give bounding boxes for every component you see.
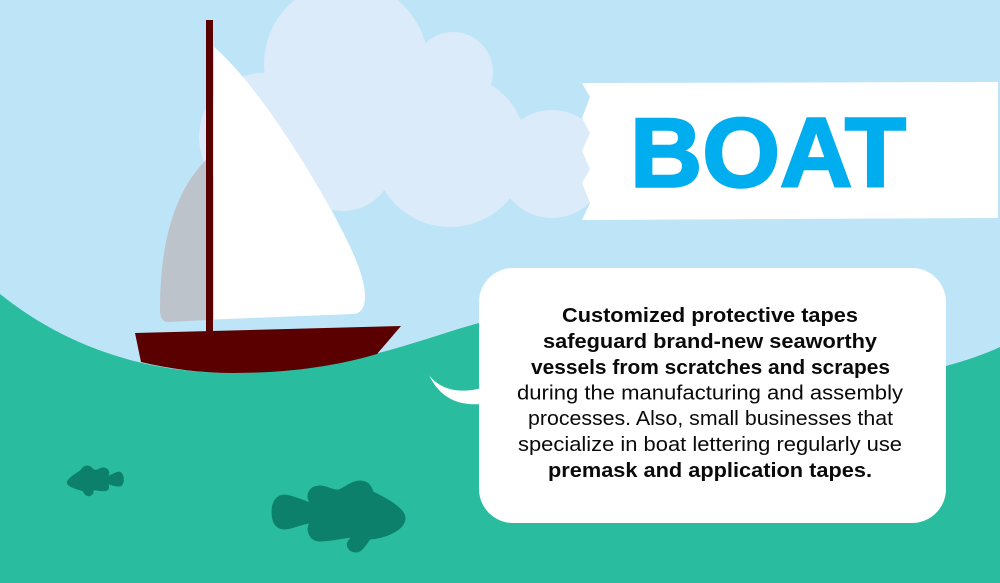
description text: specialize in boat lettering regularly use <box>518 434 902 456</box>
description text: safeguard brand-new seaworthy <box>543 331 878 353</box>
hull <box>135 326 401 373</box>
banner <box>582 82 998 220</box>
small fish <box>67 466 124 496</box>
sea <box>0 294 1000 583</box>
bubble tail <box>429 375 482 404</box>
bubble body <box>479 268 946 523</box>
sailboat <box>135 20 401 373</box>
speech bubble <box>429 268 946 523</box>
description text: Customized protective tapes <box>562 305 858 327</box>
cloud <box>199 0 606 227</box>
large fish <box>272 481 405 552</box>
description text: during the manufacturing and assembly <box>517 382 903 404</box>
description text: premask and application tapes. <box>548 460 872 482</box>
description text <box>517 305 903 482</box>
mast <box>206 20 213 333</box>
banner title: BOAT <box>630 98 906 208</box>
description text: processes. Also, small businesses that <box>528 408 893 430</box>
main sail <box>214 47 365 320</box>
rear sail <box>160 158 208 322</box>
description text: vessels from scratches and scrapes <box>531 357 890 379</box>
